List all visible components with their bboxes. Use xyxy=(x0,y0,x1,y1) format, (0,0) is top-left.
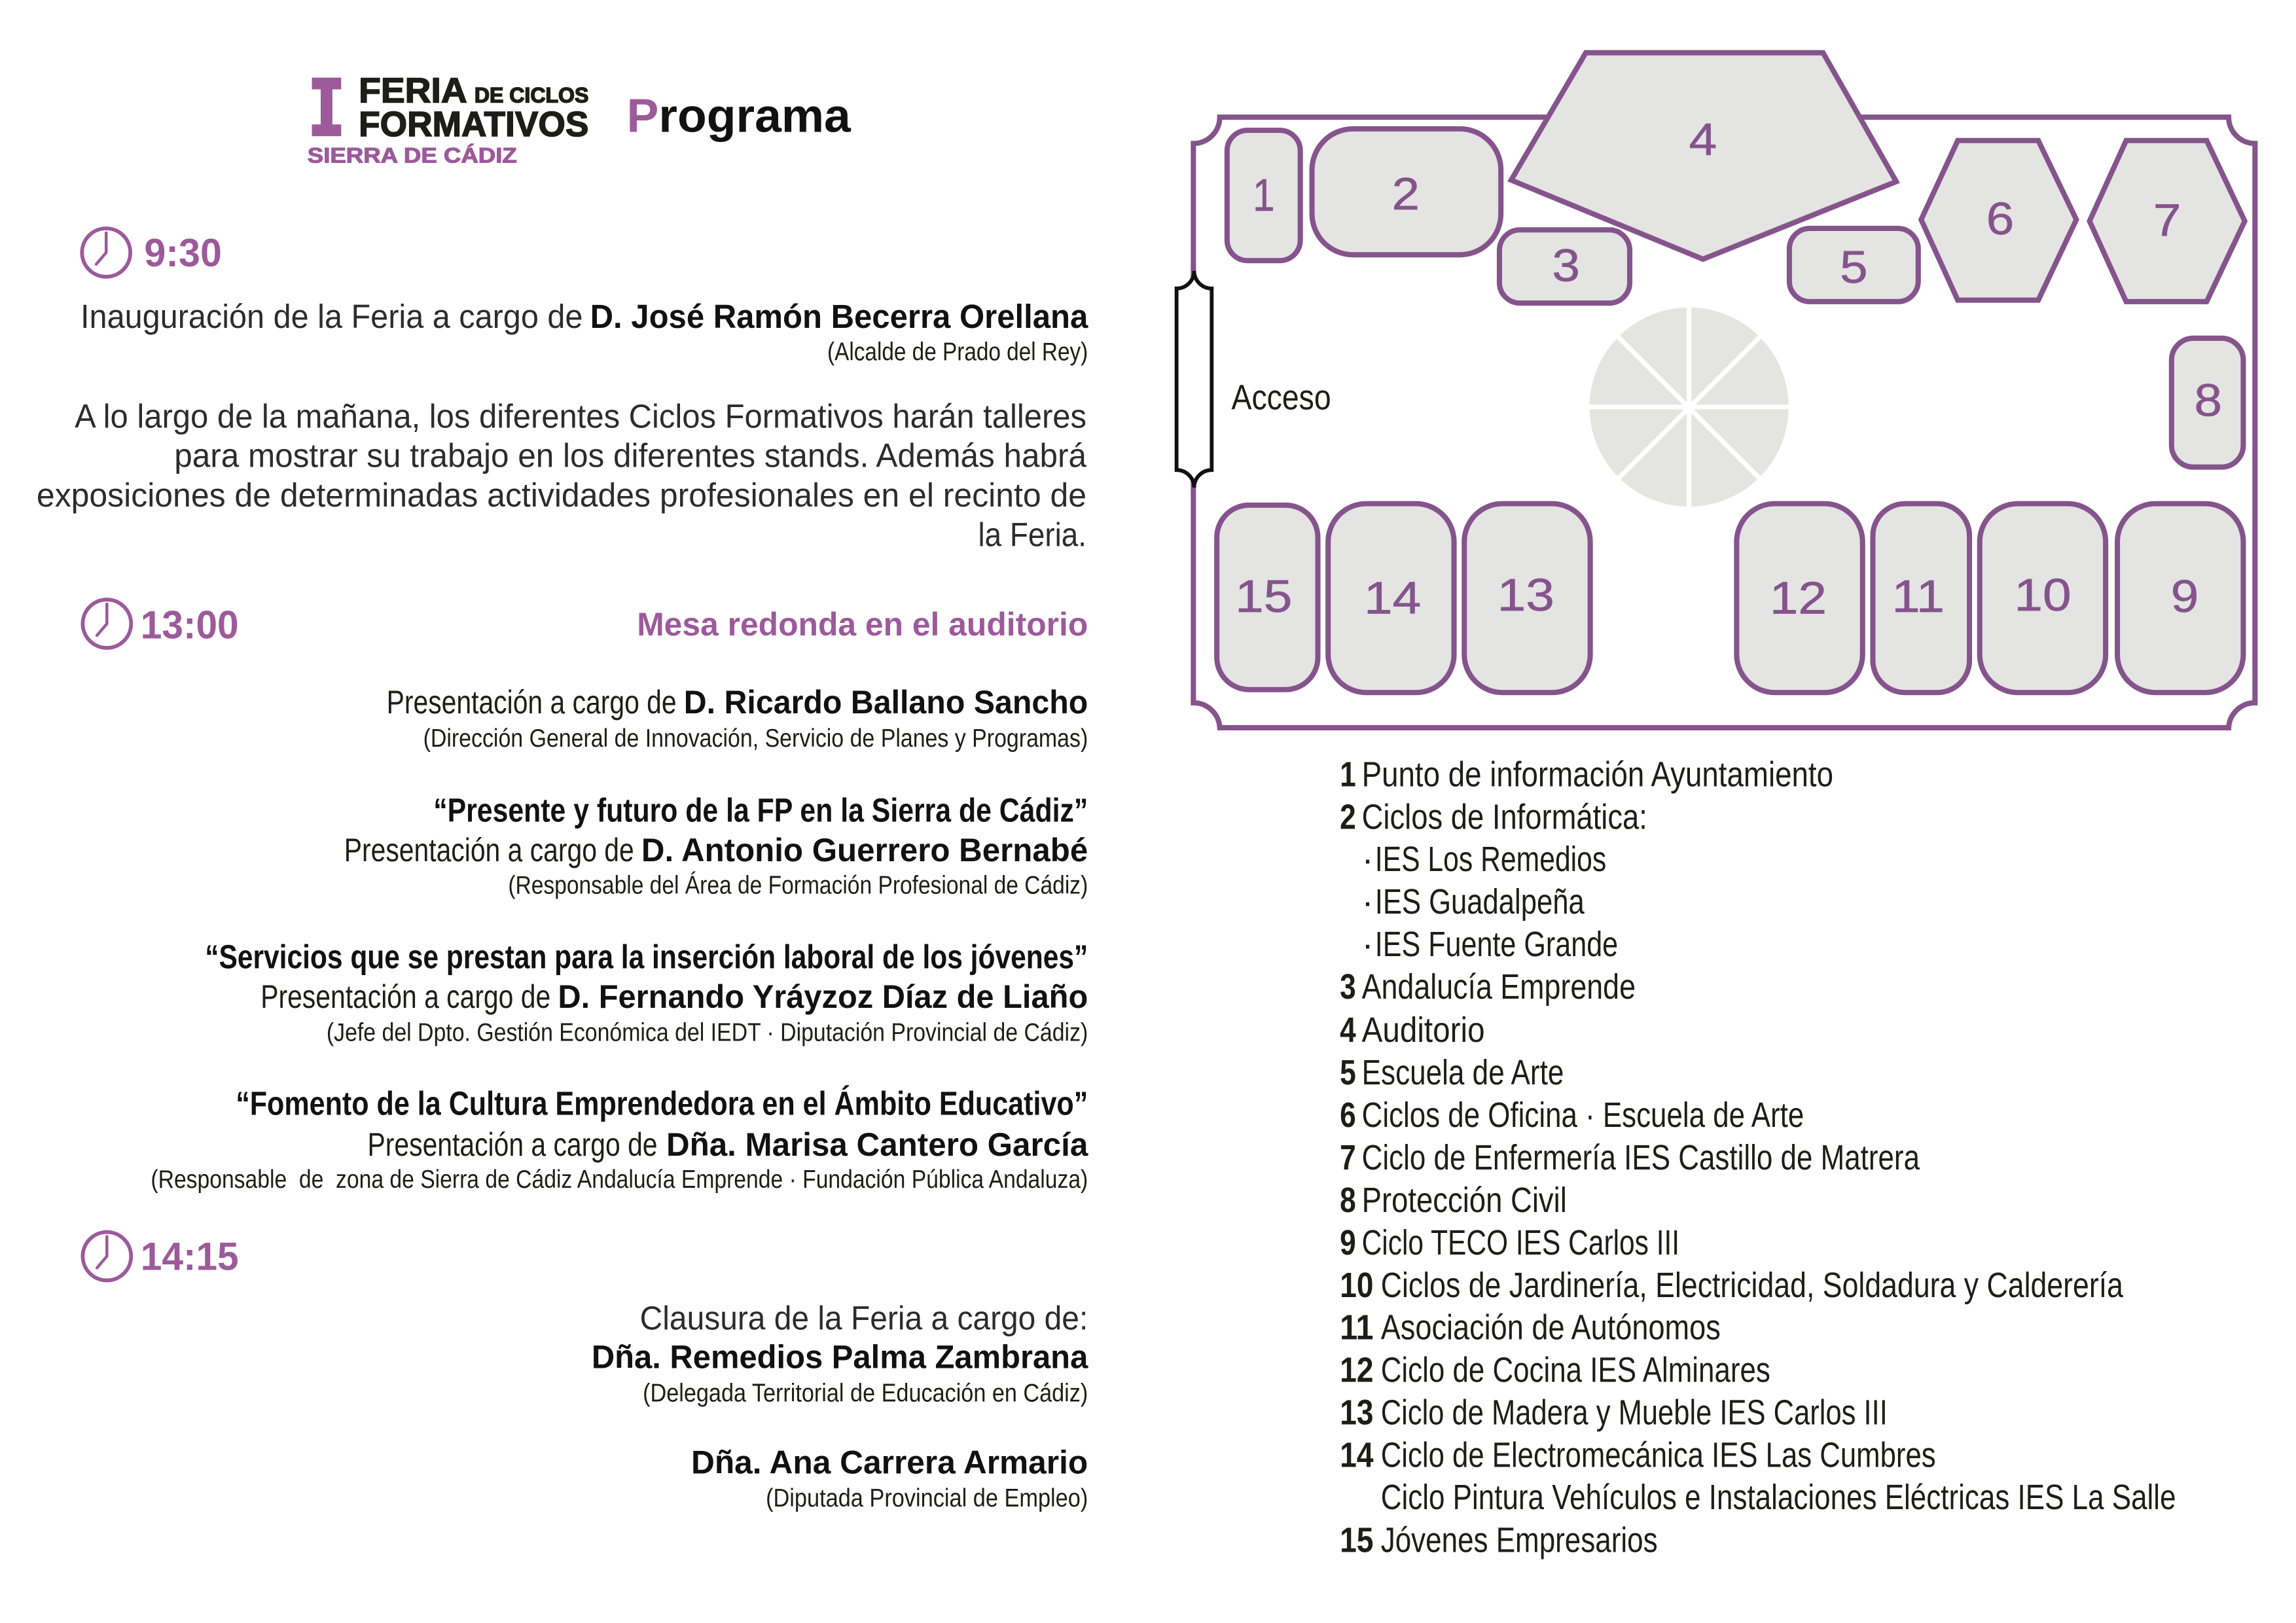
stand 8: 8 xyxy=(2195,374,2222,425)
morning paragraph: A lo largo de la mañana, los diferentes Ciclos Formativos harán talleres xyxy=(75,397,1086,435)
closing speakers: (Diputada Provincial de Empleo) xyxy=(766,1484,1088,1512)
speaker: Antonio Guerrero: “Presente y futuro de la FP en la Sierra de Cádiz” xyxy=(433,791,1088,829)
speaker: Fernando Yráyzoz: D. Fernando Yráyzoz Díaz de Liaño xyxy=(558,978,1088,1015)
legend: numbered list of stands: 3 xyxy=(1340,967,1356,1007)
stand 2: 2 xyxy=(1392,168,1420,219)
stand 11: 11 xyxy=(1892,571,1945,622)
legend: numbered list of stands: Punto de información Ayuntamiento xyxy=(1362,755,1833,794)
legend: numbered list of stands: Ciclos de Informática: xyxy=(1362,797,1647,836)
section: 9:30 inauguration xyxy=(37,228,1088,553)
stand 14 xyxy=(1328,504,1454,692)
legend: numbered list of stands: 9 xyxy=(1340,1223,1356,1262)
logo: I Feria de Ciclos Formativos: SIERRA DE CÁDIZ xyxy=(308,143,517,167)
legend: numbered list of stands: 12 xyxy=(1340,1351,1374,1390)
legend: numbered list of stands: 10 xyxy=(1340,1266,1374,1305)
legend: numbered list of stands: Ciclo de Cocina IES Alminares xyxy=(1381,1351,1770,1390)
stand 5: 5 xyxy=(1840,241,1868,293)
time 9:30: 9:30 xyxy=(144,230,222,275)
closing speakers xyxy=(592,1298,1088,1512)
legend: numbered list of stands: · xyxy=(1362,882,1374,921)
closing speakers: Clausura de la Feria a cargo de: xyxy=(640,1298,1088,1336)
inauguration text: D. José Ramón Becerra Orellana xyxy=(590,297,1088,335)
stand 13 xyxy=(1464,504,1590,692)
speaker: Fernando Yráyzoz: (Jefe del Dpto. Gestión Económica del IEDT · Diputación Provincial de Cádiz) xyxy=(327,1019,1088,1047)
legend: numbered list of stands: 4 xyxy=(1340,1010,1356,1050)
stand 11 xyxy=(1873,504,1969,692)
stand 15 xyxy=(1217,505,1318,690)
closing speakers: Dña. Remedios Palma Zambrana xyxy=(592,1338,1088,1375)
inauguration text xyxy=(81,297,1088,366)
legend: numbered list of stands: Asociación de Autónomos xyxy=(1381,1308,1721,1347)
speaker: Ricardo Ballano: D. Ricardo Ballano Sancho xyxy=(684,683,1088,721)
stand 9 xyxy=(2117,504,2243,692)
heading: Mesa redonda: Mesa redonda en el auditorio xyxy=(637,605,1088,643)
legend: numbered list of stands: Ciclo de Electromecánica IES Las Cumbres xyxy=(1381,1435,1936,1474)
legend: numbered list of stands: 15 xyxy=(1340,1520,1374,1560)
legend: numbered list of stands: 2 xyxy=(1340,797,1356,836)
time 14:15: 14:15 xyxy=(141,1234,239,1278)
stand 15: 15 xyxy=(1235,571,1292,622)
legend: numbered list of stands: 5 xyxy=(1340,1053,1356,1092)
stand 12: 12 xyxy=(1770,572,1827,623)
closing speakers: Dña. Ana Carrera Armario xyxy=(691,1443,1088,1480)
legend: numbered list of stands: IES Los Remedios xyxy=(1375,840,1606,879)
stand 3 xyxy=(1499,230,1630,303)
stand 7 xyxy=(2090,141,2245,302)
morning paragraph xyxy=(37,397,1086,553)
stand 9: 9 xyxy=(2171,571,2198,622)
inauguration text: (Alcalde de Prado del Rey) xyxy=(827,338,1088,366)
stand 4: auditorium xyxy=(1511,53,1896,259)
stand 1 xyxy=(1227,130,1300,260)
speaker: Marisa Cantero: Presentación a cargo de xyxy=(368,1126,658,1163)
speaker: Fernando Yráyzoz: “Servicios que se prestan para la inserción laboral de los jóvenes” xyxy=(205,937,1088,975)
legend: numbered list of stands: Jóvenes Empresarios xyxy=(1381,1520,1658,1560)
speaker: Ricardo Ballano xyxy=(387,683,1088,753)
speaker: Ricardo Ballano: (Dirección General de Innovación, Servicio de Planes y Programas) xyxy=(423,724,1088,753)
legend: numbered list of stands: Auditorio xyxy=(1362,1010,1485,1050)
morning paragraph: exposiciones de determinadas actividades profesionales en el recinto de xyxy=(37,476,1086,514)
legend: numbered list of stands xyxy=(1340,755,2176,1560)
title: Programa: Programa xyxy=(627,89,851,142)
stand 6 xyxy=(1921,141,2076,300)
logo: I Feria de Ciclos Formativos xyxy=(308,71,588,167)
logo: I Feria de Ciclos Formativos: DE CICLOS xyxy=(475,84,588,107)
legend: numbered list of stands: 14 xyxy=(1340,1435,1374,1474)
speaker: Fernando Yráyzoz: Presentación a cargo de xyxy=(260,978,550,1015)
stand 5 xyxy=(1789,228,1918,302)
stand 14: 14 xyxy=(1364,572,1421,623)
icon: clock 13:00 xyxy=(82,599,131,648)
stand 8 xyxy=(2172,338,2243,467)
stand 1: 1 xyxy=(1253,169,1275,221)
icon: clock 9:30 xyxy=(82,228,130,277)
inauguration text: Inauguración de la Feria a cargo de xyxy=(81,297,583,335)
stand 10: 10 xyxy=(2014,569,2072,620)
central circular area xyxy=(1586,304,1792,510)
legend: numbered list of stands: Ciclos de Oficina · Escuela de Arte xyxy=(1362,1096,1804,1135)
legend: numbered list of stands: 8 xyxy=(1340,1181,1356,1220)
speaker: Antonio Guerrero xyxy=(344,791,1088,899)
stand 2 xyxy=(1312,129,1501,255)
stand 13: 13 xyxy=(1498,569,1554,620)
logo: I Feria de Ciclos Formativos: FERIA xyxy=(359,71,467,111)
stand 7: 7 xyxy=(2153,194,2181,245)
access gate xyxy=(1177,271,1211,488)
legend: numbered list of stands: Protección Civil xyxy=(1362,1181,1567,1220)
legend: numbered list of stands: · xyxy=(1362,925,1374,964)
stand 3: 3 xyxy=(1552,240,1580,291)
section: 13:00 round table xyxy=(82,599,1088,1194)
venue outline xyxy=(1193,117,2255,728)
speaker: Marisa Cantero: (Responsable de zona de Sierra de Cádiz Andalucía Emprende · Fundación Pública Andaluza) xyxy=(151,1166,1088,1194)
legend: numbered list of stands: IES Guadalpeña xyxy=(1375,882,1585,921)
stand 6: 6 xyxy=(1986,193,2014,244)
speaker: Antonio Guerrero: D. Antonio Guerrero Bernabé xyxy=(641,831,1088,868)
stand 4: auditorium: 4 xyxy=(1689,114,1717,165)
legend: numbered list of stands: Ciclo de Madera y Mueble IES Carlos III xyxy=(1381,1393,1888,1432)
speaker: Fernando Yráyzoz xyxy=(205,937,1088,1047)
legend: numbered list of stands: Escuela de Arte xyxy=(1362,1053,1564,1092)
panel: fair floor plan xyxy=(1177,53,2255,728)
stand 10 xyxy=(1980,504,2106,692)
closing speakers: (Delegada Territorial de Educación en Cádiz) xyxy=(643,1380,1088,1408)
legend: numbered list of stands: 11 xyxy=(1340,1308,1374,1347)
speaker: Marisa Cantero: “Fomento de la Cultura Emprendedora en el Ámbito Educativo” xyxy=(236,1084,1088,1122)
speaker: Antonio Guerrero: Presentación a cargo de xyxy=(344,831,634,868)
stand 12 xyxy=(1736,504,1863,692)
legend: numbered list of stands: 6 xyxy=(1340,1096,1356,1135)
speaker: Ricardo Ballano: Presentación a cargo de xyxy=(387,683,677,721)
morning paragraph: para mostrar su trabajo en los diferentes stands. Además habrá xyxy=(174,437,1086,474)
time 13:00: 13:00 xyxy=(141,602,239,647)
icon: clock 14:15 xyxy=(82,1232,131,1280)
section: 14:15 closing xyxy=(82,1232,1088,1512)
speaker: Marisa Cantero xyxy=(151,1084,1088,1194)
legend: numbered list of stands: IES Fuente Grande xyxy=(1375,925,1618,964)
legend: numbered list of stands: 1 xyxy=(1340,755,1356,794)
legend: numbered list of stands: · xyxy=(1362,840,1374,879)
speaker: Marisa Cantero: Dña. Marisa Cantero García xyxy=(666,1126,1088,1163)
legend: numbered list of stands: Andalucía Emprende xyxy=(1362,967,1636,1007)
morning paragraph: la Feria. xyxy=(978,515,1086,553)
label: Acceso: Acceso xyxy=(1232,378,1331,417)
logo: I Feria de Ciclos Formativos: FORMATIVOS xyxy=(359,105,588,144)
legend: numbered list of stands: 7 xyxy=(1340,1138,1356,1177)
legend: numbered list of stands: Ciclo de Enfermería IES Castillo de Matrera xyxy=(1362,1138,1920,1177)
speaker: Antonio Guerrero: (Responsable del Área de Formación Profesional de Cádiz) xyxy=(508,871,1088,899)
legend: numbered list of stands: Ciclo TECO IES Carlos III xyxy=(1362,1223,1679,1262)
legend: numbered list of stands: 13 xyxy=(1340,1393,1374,1432)
legend: numbered list of stands: Ciclos de Jardinería, Electricidad, Soldadura y Calderería xyxy=(1381,1266,2123,1305)
